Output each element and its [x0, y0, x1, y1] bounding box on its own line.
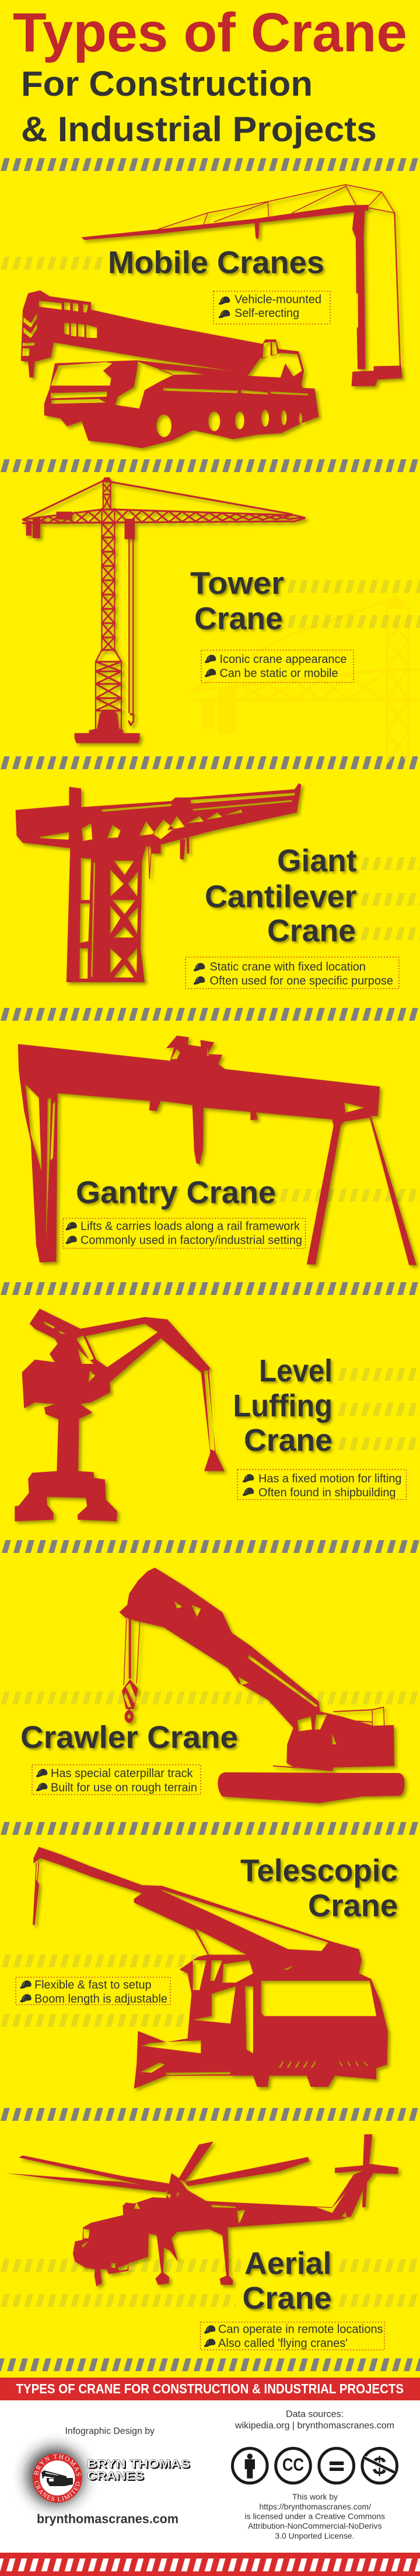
fact: Built for use on rough terrain [51, 1781, 197, 1794]
fact box [16, 1977, 170, 2005]
icon: cc: CC [282, 2455, 304, 2474]
icon: helmet [36, 1769, 47, 1777]
illustration: crawler crane [119, 1568, 404, 1803]
brand name: CRANES [88, 2471, 145, 2484]
icon: non commercial: $ [372, 2452, 387, 2480]
icon: helmet [204, 2339, 215, 2347]
licence text: This work by [292, 2492, 338, 2501]
panel: tower crane [23, 477, 420, 762]
panel: aerial crane [0, 2134, 420, 2350]
heading [243, 2246, 331, 2316]
faded heading stripes [0, 1691, 420, 1704]
fact: Self-erecting [235, 307, 299, 320]
illustration: aerial crane helicopter [5, 2134, 398, 2287]
icon: helmet [204, 2325, 215, 2334]
ghost tower crane [191, 595, 420, 762]
heading [233, 1353, 332, 1458]
fact: Has a fixed motion for lifting [258, 1472, 401, 1485]
bottom hazard band [0, 2553, 420, 2576]
design credit: Infographic Design by [65, 2427, 155, 2436]
heading: Gantry Crane [76, 1175, 276, 1210]
fact: Often found in shipbuilding [258, 1486, 396, 1499]
footer band [0, 2378, 420, 2400]
icon: helmet [65, 1222, 77, 1230]
subtitle line 2: & Industrial Projects [21, 110, 377, 149]
faded heading stripes [0, 1954, 202, 2027]
heading: Crane [308, 1889, 398, 1924]
fact: Lifts & carries loads along a rail framework [80, 1220, 300, 1233]
heading: Giant [277, 843, 357, 878]
heading: Crawler Crane [20, 1720, 238, 1755]
website: brynthomascranes.com [37, 2512, 178, 2526]
fact: Vehicle-mounted [235, 293, 321, 306]
fact box [63, 1219, 306, 1248]
title: Types of Crane [13, 2, 407, 64]
fact: Has special caterpillar track [51, 1767, 193, 1780]
heading [205, 843, 357, 948]
icon: helmet [36, 1783, 47, 1791]
fact box [201, 650, 354, 683]
fact box [214, 291, 330, 324]
licence text: is licensed under a Creative Commons [245, 2512, 385, 2521]
panel: gantry crane [18, 1036, 420, 1265]
illustration: mobile tower crane and truck crane [21, 184, 402, 448]
illustration: telescopic crane [33, 1847, 388, 2089]
fact: Often used for one specific purpose [210, 975, 393, 987]
panel: mobile cranes [0, 184, 402, 448]
heading: Crane [194, 601, 283, 636]
icon: helmet [20, 1981, 32, 1989]
footer [0, 2378, 420, 2576]
illustration: tower crane [23, 477, 305, 743]
heading: Crane [267, 913, 356, 948]
heading: Cantilever [205, 879, 357, 914]
brand name: CRANES [87, 2470, 144, 2483]
licence text: Attribution-NonCommercial-NoDerivs [248, 2521, 382, 2530]
heading: Aerial [244, 2246, 331, 2281]
icon: helmet [219, 310, 230, 318]
icon: helmet [20, 1994, 32, 2002]
icon: attribution [232, 2448, 267, 2483]
subtitle line 1: For Construction [21, 64, 313, 103]
data sources: wikipedia.org | brynthomascranes.com [235, 2421, 394, 2431]
heading: Tower [190, 566, 284, 601]
icon: helmet [243, 1474, 254, 1482]
panel: crawler crane [0, 1568, 420, 1803]
logo: Bryn Thomas Cranes [15, 2436, 96, 2516]
icon: helmet [194, 963, 205, 971]
fact box [186, 957, 399, 989]
fact box [237, 1469, 406, 1500]
faded heading stripes [360, 857, 420, 940]
fact box [201, 2322, 384, 2350]
heading: Luffing [233, 1388, 332, 1423]
illustration: level luffing crane [15, 1308, 225, 1521]
faded heading stripes [286, 580, 420, 628]
panel: level luffing crane [15, 1308, 420, 1521]
illustration: giant cantilever crane [16, 783, 302, 982]
icon: non commercial [362, 2448, 397, 2483]
brand name: BRYN THOMAS [88, 2459, 191, 2472]
licence text: https://brynthomascranes.com/ [259, 2502, 371, 2511]
logo: Bryn Thomas Cranes: CRANES LIMITED [34, 2481, 80, 2501]
icon: helmet [219, 296, 230, 305]
icon: helmet [205, 655, 216, 663]
illustration: gantry crane [18, 1036, 416, 1265]
brand name: BRYN THOMAS [87, 2458, 190, 2470]
heading: Crane [243, 2281, 331, 2316]
heading: Mobile Cranes [108, 245, 324, 280]
fact: Can operate in remote locations [218, 2323, 383, 2336]
fact: Commonly used in factory/industrial setting [80, 1234, 302, 1247]
icons: creative commons licence [232, 2448, 397, 2483]
faded heading stripes [0, 2259, 420, 2307]
footer background [0, 2400, 420, 2553]
heading: Crane [244, 1423, 332, 1458]
panel: giant cantilever crane [16, 783, 420, 989]
heading: Level [259, 1353, 332, 1388]
heading [240, 1854, 398, 1924]
brand name [87, 2458, 191, 2484]
data sources [235, 2409, 394, 2431]
fact: Static crane with fixed location [210, 961, 366, 973]
icon: helmet [65, 1236, 77, 1244]
icon: helmet [205, 669, 216, 677]
icon: no derivatives [319, 2448, 354, 2483]
logo: Bryn Thomas Cranes: BRYN THOMAS [34, 2454, 80, 2476]
faded heading stripes [337, 1368, 420, 1450]
title block [13, 2, 407, 149]
fact box [32, 1765, 201, 1795]
licence text [245, 2492, 385, 2540]
heading: Telescopic [240, 1854, 398, 1889]
licence text: 3.0 Unported License. [275, 2531, 355, 2540]
fact: Can be static or mobile [219, 667, 338, 680]
fact: Iconic crane appearance [219, 653, 346, 666]
faded heading stripes [0, 257, 103, 270]
icon: cc [276, 2448, 310, 2483]
fact: Also called 'flying cranes' [218, 2337, 348, 2350]
data sources: Data sources: [286, 2409, 344, 2420]
icon: helmet [194, 976, 205, 985]
icon: helmet [243, 1488, 254, 1496]
heading [190, 566, 284, 636]
faded heading stripes [279, 1189, 420, 1202]
panel: telescopic crane [0, 1847, 398, 2089]
fact: Flexible & fast to setup [34, 1978, 152, 1991]
fact: Boom length is adjustable [34, 1992, 167, 2005]
